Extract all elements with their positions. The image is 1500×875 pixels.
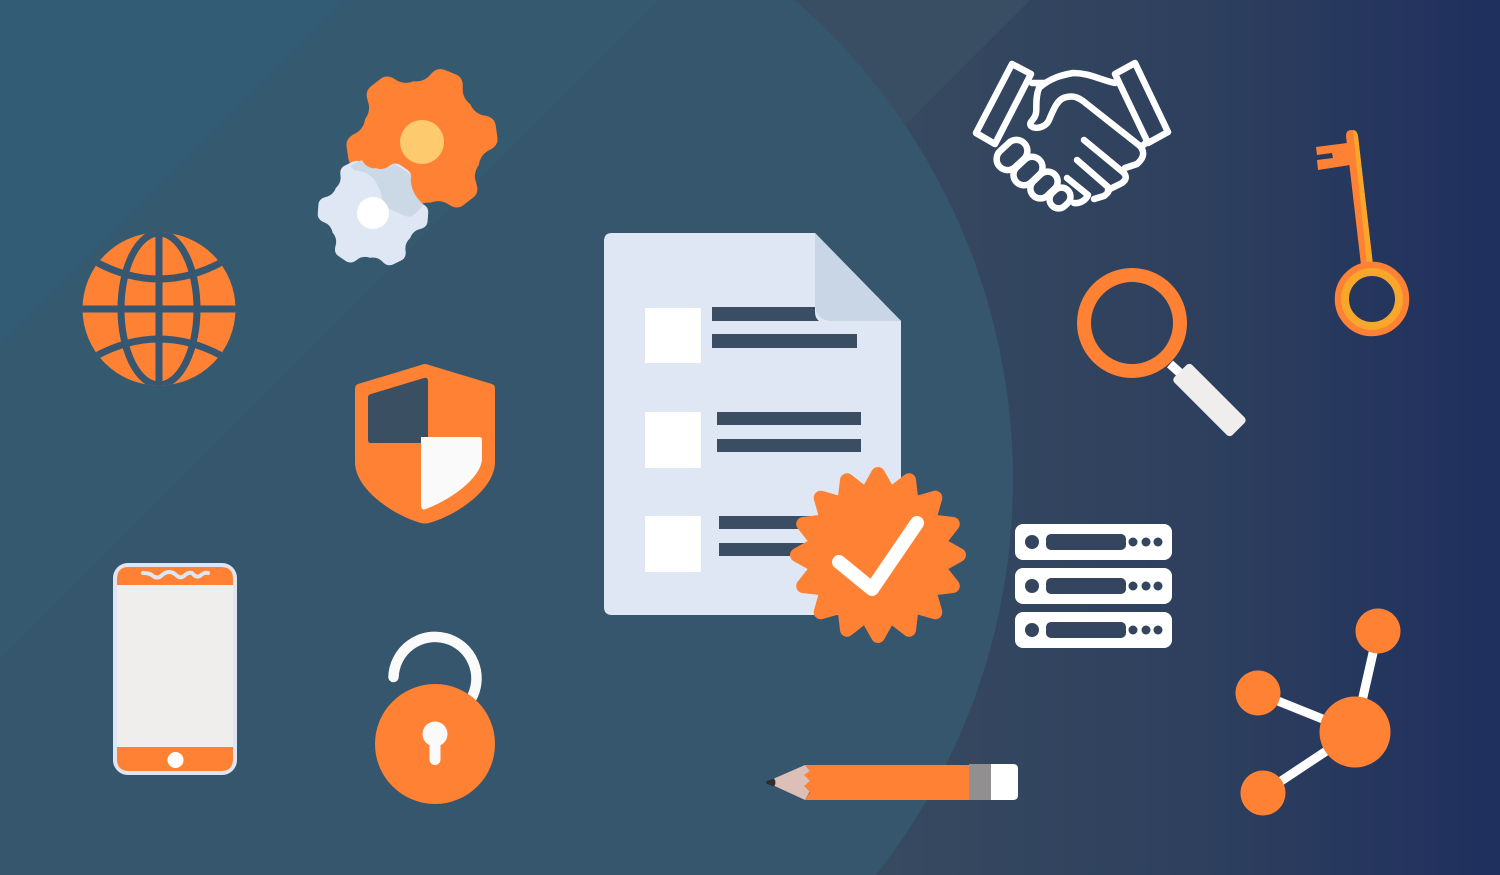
icon: server stack xyxy=(1015,524,1172,648)
large orange gear xyxy=(343,61,501,223)
icon: globe xyxy=(80,232,238,386)
checklist row 1 xyxy=(645,307,857,363)
icon: shield xyxy=(355,364,495,524)
check mark xyxy=(839,523,917,589)
phone top bar xyxy=(117,567,233,585)
icon: pencil xyxy=(766,764,1018,800)
document fold xyxy=(815,233,901,321)
key shaft xyxy=(1346,130,1373,265)
small grey gear xyxy=(317,154,429,272)
icon: molecule network xyxy=(1236,608,1400,816)
key ring xyxy=(1338,265,1406,333)
icon: handshake xyxy=(976,63,1168,212)
shield dark quadrant xyxy=(368,378,428,443)
key bit xyxy=(1316,143,1350,170)
phone bottom bar xyxy=(117,747,233,771)
server unit 2 xyxy=(1015,568,1172,604)
left cuff xyxy=(976,64,1031,144)
document xyxy=(604,233,901,615)
icon: gears xyxy=(317,61,501,272)
right cuff xyxy=(1115,63,1168,143)
checklist row 2 xyxy=(645,412,861,468)
shield white quadrant xyxy=(421,437,482,510)
upper hand and thumb xyxy=(1032,80,1045,86)
icon: smartphone xyxy=(115,565,235,773)
icon: magnifying glass xyxy=(1084,275,1247,438)
icon: key xyxy=(1316,130,1406,333)
checklist row 3 xyxy=(645,516,819,572)
fingers xyxy=(1084,140,1126,190)
icon: open padlock xyxy=(375,637,495,804)
server unit 1 xyxy=(1015,524,1172,560)
left hand knuckles xyxy=(992,135,1032,175)
icon: approval badge xyxy=(797,474,959,636)
server unit 3 xyxy=(1015,612,1172,648)
